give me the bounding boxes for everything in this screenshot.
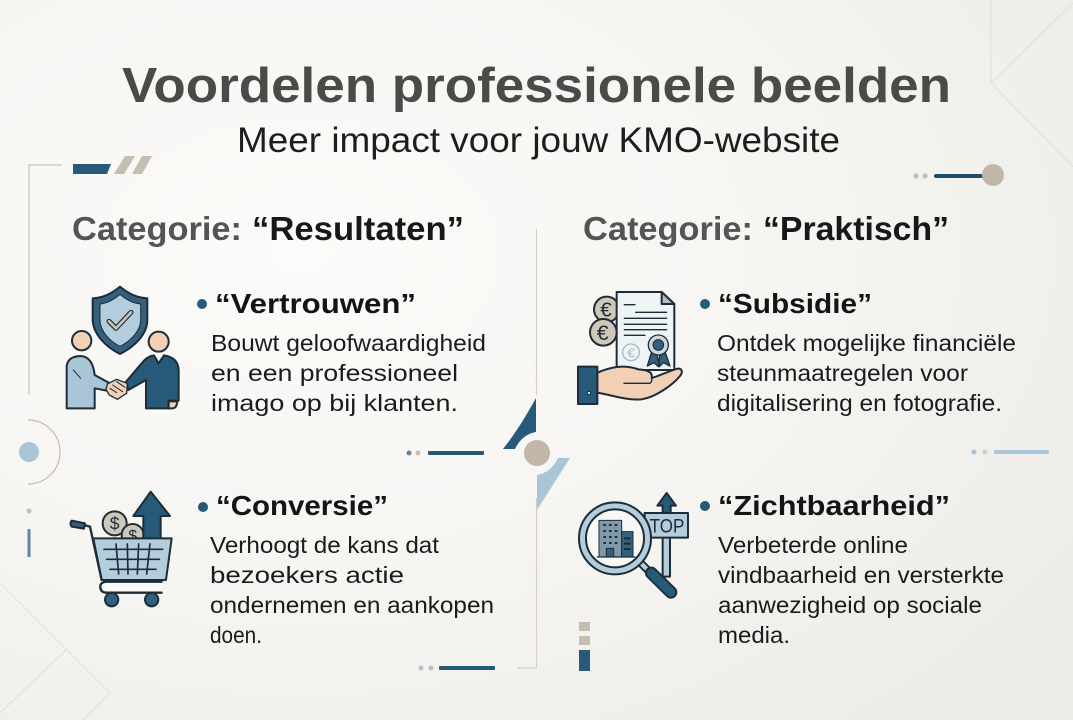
item text: bezoekers actie — [210, 562, 404, 588]
decoration: top left frame and bars — [29, 156, 152, 395]
subtitle: Meer impact voor jouw KMO-website — [237, 121, 840, 160]
decoration: stacked squares — [579, 622, 590, 671]
icon: shield and handshake — [67, 287, 179, 408]
decoration: left circle — [19, 420, 60, 557]
icon: shopping cart with coins and arrow: $ — [128, 528, 137, 545]
icon: subsidy document with coins and hand: € — [627, 346, 635, 360]
item title: “Subsidie” — [718, 288, 872, 319]
icon: shopping cart with coins and arrow — [70, 492, 172, 606]
decoration: connector right — [972, 450, 1049, 454]
item: Vertrouwen — [67, 287, 486, 416]
decoration: connector under left top item — [406, 450, 484, 456]
decoration: top right connector — [914, 164, 1004, 186]
item text: digitalisering en fotografie. — [717, 390, 1002, 416]
icon: magnifier with building and top sign — [579, 493, 688, 592]
panel: category Resultaten — [67, 210, 494, 648]
decoration: connector bottom — [418, 666, 495, 670]
item text: en een professioneel — [211, 360, 458, 386]
item text: imago op bij klanten. — [211, 390, 458, 416]
heading: Praktisch: Categorie: — [583, 210, 753, 247]
item text — [718, 532, 1004, 648]
icon: subsidy document with coins and hand: € — [597, 321, 609, 345]
item title: “Vertrouwen” — [215, 288, 416, 319]
icon: magnifier with building and top sign: TOP — [650, 517, 684, 538]
panel: category Praktisch — [578, 210, 1016, 648]
item text: vindbaarheid en versterkte — [718, 562, 1004, 588]
item: Conversie — [70, 490, 494, 648]
item text: Ontdek mogelijke financiële — [717, 330, 1016, 356]
heading: Praktisch: “Praktisch” — [763, 210, 949, 247]
item text: Bouwt geloofwaardigheid — [211, 330, 486, 356]
decoration: central compass shape — [503, 398, 570, 510]
item title: “Conversie” — [216, 490, 388, 521]
item title: “Zichtbaarheid” — [718, 490, 950, 521]
item text: Verhoogt de kans dat — [210, 532, 440, 558]
item text: steunmaatregelen voor — [717, 360, 968, 386]
bullet — [700, 299, 710, 309]
item: Subsidie — [578, 288, 1016, 416]
item text — [211, 330, 486, 416]
item: Zichtbaarheid — [579, 490, 1004, 648]
icon: shopping cart with coins and arrow: $ — [110, 513, 120, 533]
item text: media. — [718, 622, 790, 648]
bullet — [197, 299, 207, 309]
icon: subsidy document with coins and hand: € — [600, 299, 612, 322]
item text: aanwezigheid op sociale — [718, 592, 982, 618]
item text: Verbeterde online — [718, 532, 908, 558]
heading: Resultaten: Categorie: — [72, 210, 242, 247]
decoration: central divider — [517, 229, 536, 668]
heading: Praktisch — [583, 210, 949, 247]
item text: ondernemen en aankopen — [210, 592, 494, 618]
bullet — [198, 502, 208, 512]
bullet — [700, 501, 710, 511]
title: Voordelen professionele beelden — [122, 59, 951, 113]
heading: Resultaten — [72, 210, 464, 247]
item text — [717, 330, 1016, 416]
item text — [210, 532, 494, 648]
icon: subsidy document with coins and hand — [578, 292, 682, 404]
heading: Resultaten: “Resultaten” — [252, 210, 464, 247]
item text: doen. — [210, 622, 262, 648]
